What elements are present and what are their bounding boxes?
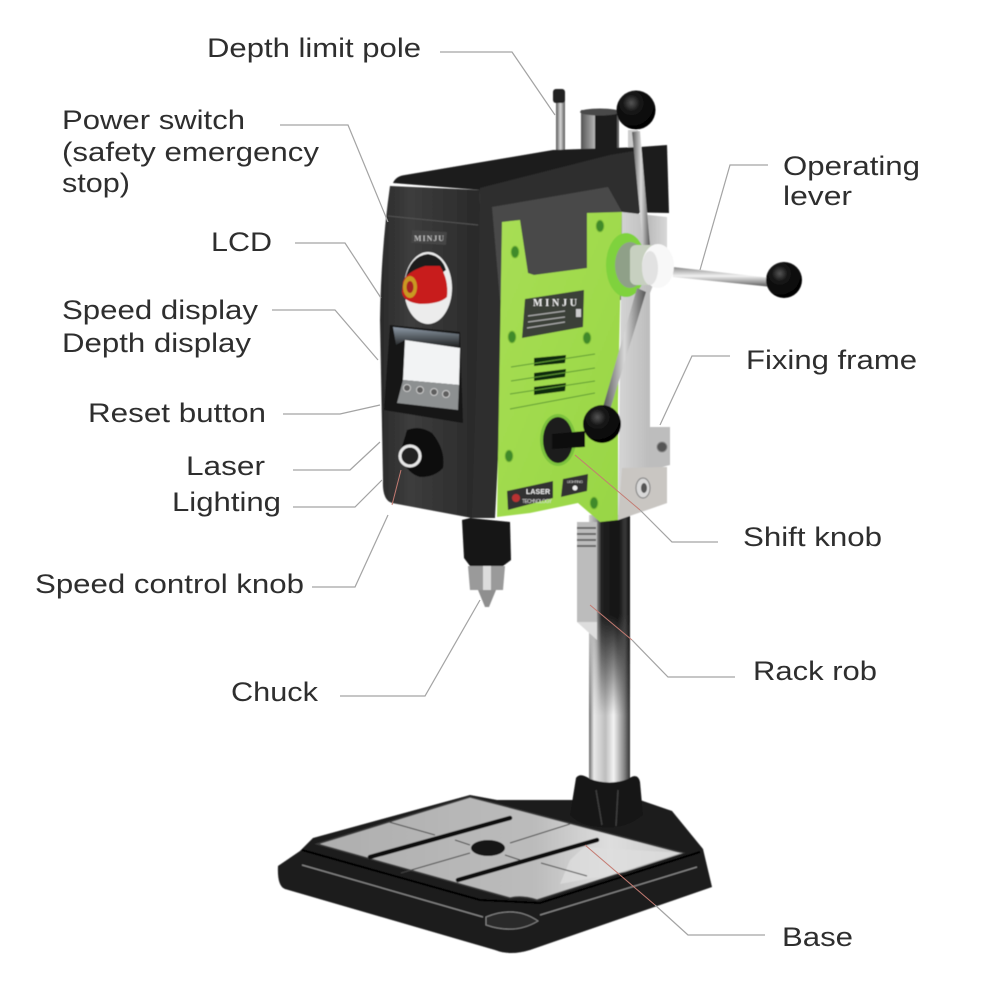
label: laser: Laser (186, 451, 265, 481)
label: power switch: (safety emergency (62, 137, 320, 167)
shift knob (540, 414, 585, 466)
label: speed and depth display (62, 295, 378, 360)
name plate: MINJU (533, 298, 577, 309)
base (278, 795, 712, 953)
base table plate (317, 797, 683, 900)
label: speed control knob (35, 470, 401, 599)
emergency stop knob (402, 252, 452, 324)
laser badge (507, 481, 553, 510)
label: reset button: Reset button (88, 398, 266, 428)
label: fixing frame (660, 345, 917, 425)
label: operating lever: lever (783, 181, 852, 211)
name plate (522, 290, 584, 338)
logo badge (411, 230, 447, 245)
label: power switch: Power switch (62, 105, 245, 135)
silver fixing frame (618, 212, 670, 520)
label: reset button (88, 398, 380, 428)
label: speed and depth display: Speed display (62, 295, 259, 325)
column (570, 515, 643, 828)
label: operating lever: Operating (783, 151, 920, 181)
label: chuck: Chuck (231, 677, 319, 707)
label: shift knob (575, 455, 882, 552)
drill press illustration (278, 89, 802, 953)
label: LCD (211, 227, 381, 298)
handle balls (616, 90, 656, 130)
label: lighting (172, 480, 382, 517)
head housing (380, 145, 669, 518)
front face (380, 186, 480, 518)
lighting badge: LIGHTING (567, 479, 583, 484)
top spindle cap (580, 108, 638, 156)
lighting badge (561, 474, 588, 497)
label: power switch: stop) (62, 168, 130, 198)
label: base: Base (782, 922, 853, 952)
label: fixing frame: Fixing frame (746, 345, 917, 375)
label: rack rob: Rack rob (753, 656, 877, 686)
label: LCD: LCD (211, 227, 272, 257)
green front plate (497, 212, 622, 522)
vents (510, 354, 595, 409)
label: lighting: Lighting (172, 487, 281, 517)
chuck (462, 518, 511, 607)
label: shift knob: Shift knob (743, 522, 882, 552)
label: base (585, 845, 853, 952)
label: speed control knob: Speed control knob (35, 569, 304, 599)
speed control knob (400, 428, 444, 477)
label: depth limit pole: Depth limit pole (207, 33, 421, 63)
label: power switch (62, 105, 388, 222)
label: operating lever (700, 151, 920, 270)
label: rack rob (590, 605, 877, 686)
LCD buttons (404, 384, 450, 398)
label: depth limit pole (207, 33, 555, 115)
logo badge: MINJU (414, 234, 444, 243)
spindle hub and handles (583, 90, 802, 443)
laser badge: TECHNOLOGY (522, 499, 553, 505)
depth limit pole (553, 89, 565, 155)
laser badge: LASER (526, 489, 550, 496)
LCD display (384, 325, 463, 423)
label: speed and depth display: Depth display (62, 328, 252, 358)
label: laser (186, 442, 380, 481)
label: chuck (231, 600, 480, 707)
